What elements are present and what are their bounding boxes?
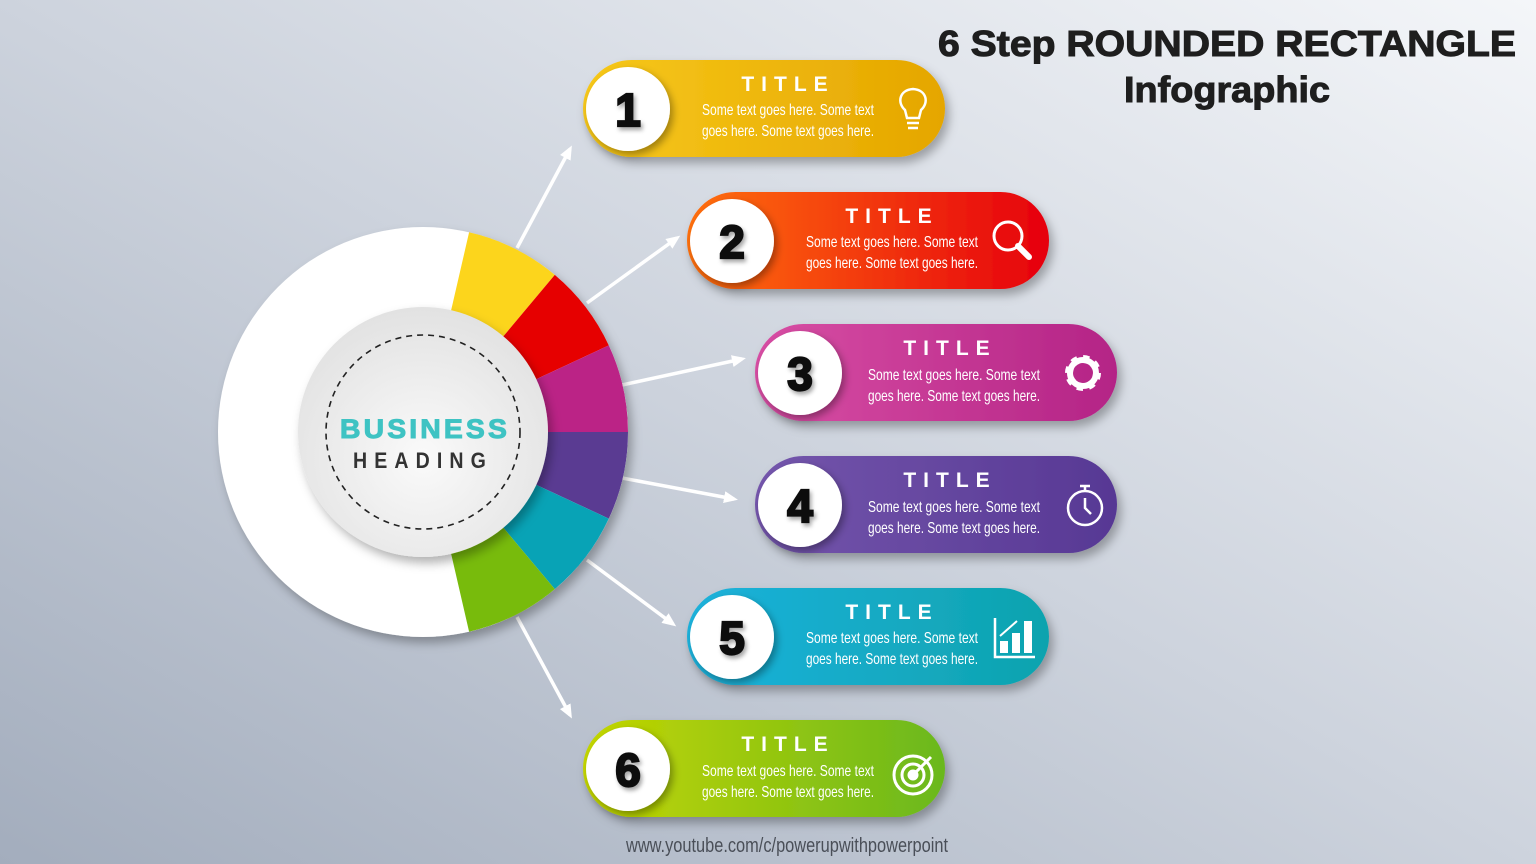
step 4: Some text goes here. Some text [868, 499, 1040, 516]
step 2: 2 [719, 216, 745, 268]
title [938, 23, 1516, 110]
step 3: Some text goes here. Some text [868, 367, 1040, 384]
step 3: 3 [787, 348, 813, 400]
step 2: goes here. Some text goes here. [806, 255, 978, 272]
step 6: 6 [615, 744, 641, 796]
step 1: TITLE [741, 73, 835, 96]
step 3: goes here. Some text goes here. [868, 388, 1040, 405]
step 4: TITLE [903, 469, 997, 492]
step 1: goes here. Some text goes here. [702, 123, 874, 140]
step 3 [755, 324, 1117, 421]
icon: stopwatch [1068, 486, 1102, 525]
step 2 [687, 192, 1049, 289]
step 5: Some text goes here. Some text [806, 630, 978, 647]
step 6: goes here. Some text goes here. [702, 784, 874, 801]
icon: chart [995, 618, 1035, 657]
step 5: 5 [719, 612, 745, 664]
icon: magnifier [994, 222, 1029, 257]
center circle: BUSINESS [340, 414, 510, 444]
step 6: TITLE [741, 733, 835, 756]
step 2: Some text goes here. Some text [806, 234, 978, 251]
step 3: TITLE [903, 337, 997, 360]
icon: bulb [900, 89, 926, 128]
step 1: 1 [615, 84, 641, 136]
title: Infographic [1124, 69, 1330, 110]
center circle [298, 307, 548, 557]
step 4 [755, 456, 1117, 553]
footer url: www.youtube.com/c/powerupwithpowerpoint [625, 835, 948, 857]
step 4: goes here. Some text goes here. [868, 520, 1040, 537]
step 4: 4 [787, 480, 813, 532]
step 5: goes here. Some text goes here. [806, 651, 978, 668]
step 6 [583, 720, 945, 817]
step 6: Some text goes here. Some text [702, 763, 874, 780]
step 1 [583, 60, 945, 157]
title: 6 Step ROUNDED RECTANGLE [938, 23, 1516, 64]
step 2: TITLE [845, 205, 939, 228]
step 5: TITLE [845, 601, 939, 624]
center circle: HEADING [353, 448, 493, 473]
step 1: Some text goes here. Some text [702, 102, 874, 119]
step 5 [687, 588, 1049, 685]
donut chart [218, 227, 628, 637]
icon: gear [1069, 359, 1097, 387]
arrows [517, 149, 742, 715]
icon: target [894, 756, 932, 794]
